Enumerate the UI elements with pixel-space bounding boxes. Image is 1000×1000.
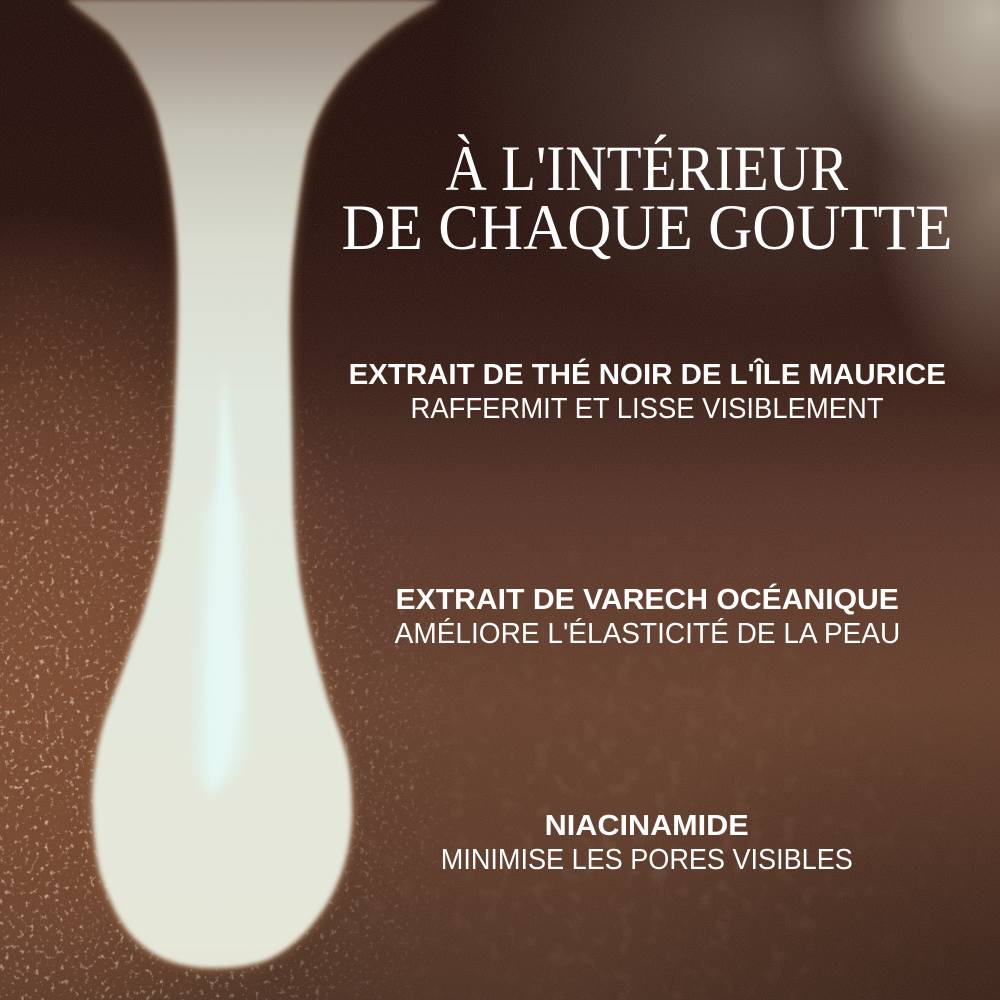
title — [342, 133, 952, 264]
ingredient: niacinamide — [441, 810, 853, 876]
title: DE CHAQUE GOUTTE — [342, 192, 952, 264]
drop highlight — [197, 365, 246, 795]
ingredient: black tea — [348, 358, 946, 425]
milky drop — [67, 0, 440, 968]
skin texture — [0, 266, 728, 1000]
ingredient: kelp — [394, 584, 900, 650]
ingredient benefit: MINIMISE LES PORES VISIBLES — [441, 844, 853, 876]
ingredient name: EXTRAIT DE VARECH OCÉANIQUE — [395, 584, 899, 616]
title: À L'INTÉRIEUR — [446, 133, 848, 205]
ingredient benefit: AMÉLIORE L'ÉLASTICITÉ DE LA PEAU — [394, 618, 900, 650]
ingredient name: NIACINAMIDE — [545, 810, 749, 842]
ingredient benefit: RAFFERMIT ET LISSE VISIBLEMENT — [410, 393, 884, 425]
ingredient name: EXTRAIT DE THÉ NOIR DE L'ÎLE MAURICE — [348, 359, 946, 391]
